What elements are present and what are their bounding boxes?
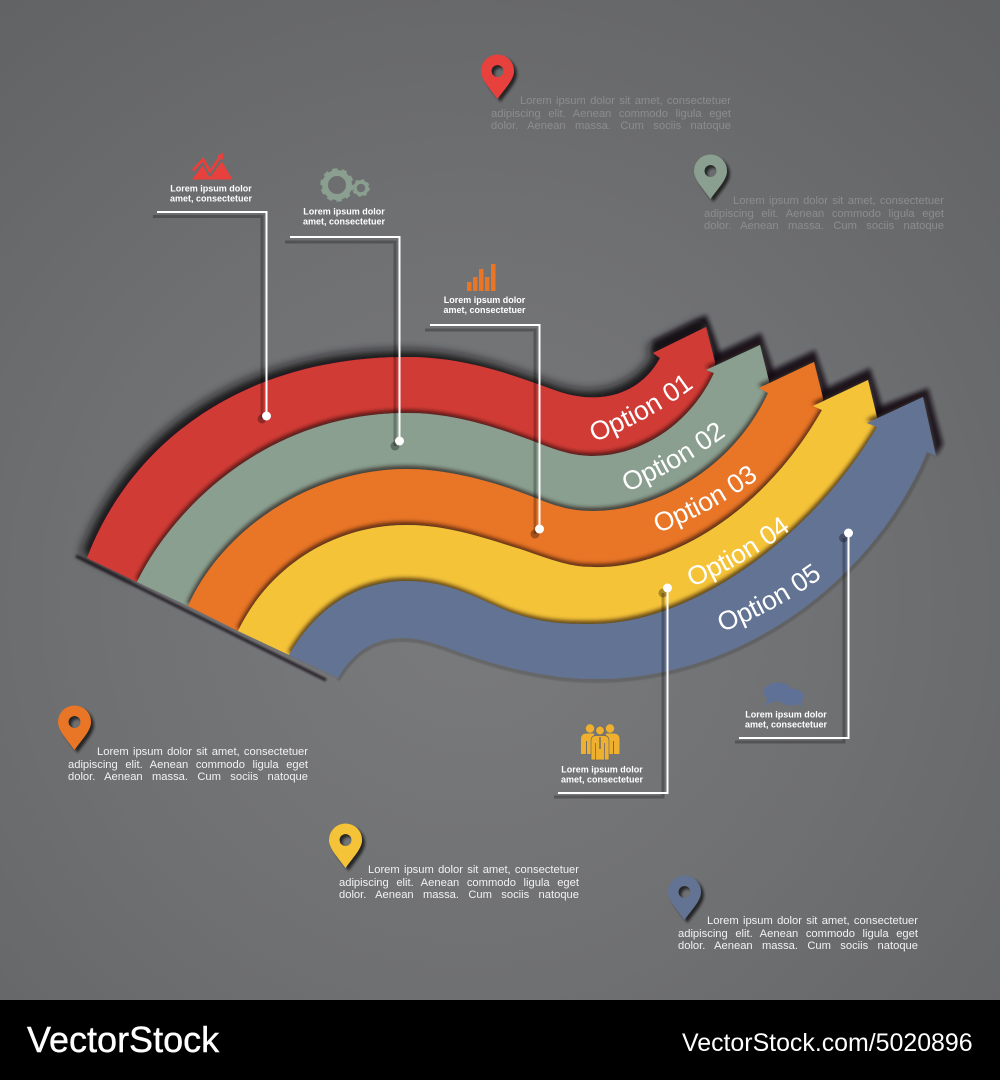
- label: option 01: Option 01: [590, 375, 694, 440]
- text block: blue pin: adipiscing elit. Aenean commodo ligula eget: [678, 928, 918, 940]
- pin: red: [481, 54, 514, 99]
- text block: red pin: Lorem ipsum dolor sit amet, consectetuer: [520, 95, 731, 107]
- text block: orange pin: adipiscing elit. Aenean commodo ligula eget: [68, 758, 308, 770]
- text block: yellow pin: adipiscing elit. Aenean commodo ligula eget: [339, 876, 579, 888]
- icon: gears: [322, 170, 369, 200]
- pin: blue: [668, 876, 701, 920]
- band: option 04: [238, 380, 877, 655]
- leader line 4: [554, 584, 672, 797]
- band: option 03: [188, 362, 823, 631]
- icon: people: [581, 724, 620, 760]
- caption 4: Lorem ipsum dolor: [561, 764, 643, 774]
- caption 5: Lorem ipsum dolor: [745, 710, 827, 720]
- text block: green pin: adipiscing elit. Aenean commodo ligula eget: [704, 208, 944, 220]
- band: option 02: [137, 345, 769, 606]
- icon: bar chart: [467, 264, 496, 291]
- leader line 2: [285, 237, 404, 450]
- text block: yellow pin: Lorem ipsum dolor sit amet, consectetuer: [368, 864, 579, 876]
- icon: mountain chart: [192, 153, 232, 180]
- caption 3: Lorem ipsum dolor: [444, 295, 526, 305]
- wave chart: five option bands: [76, 316, 936, 683]
- arrow head shadows: [653, 315, 943, 456]
- leader line 5: [735, 528, 853, 742]
- text block: green pin: [704, 195, 944, 232]
- blue band edge shadow: [338, 454, 929, 681]
- footer brand: VectorStock: [27, 1019, 220, 1060]
- leader line 1: [153, 212, 271, 424]
- pin: green: [694, 154, 727, 199]
- caption 1: amet, consectetuer: [170, 194, 253, 204]
- footer bar: [0, 1000, 1000, 1080]
- text block: red pin: dolor. Aenean massa. Cum sociis natoque: [491, 120, 731, 132]
- caption 1: Lorem ipsum dolor: [170, 184, 252, 194]
- text block: blue pin: [678, 915, 918, 952]
- icon: speech bubbles: [764, 682, 804, 708]
- text block: green pin: dolor. Aenean massa. Cum sociis natoque: [704, 220, 944, 232]
- band: option 05: [289, 397, 936, 679]
- text block: yellow pin: [339, 864, 579, 901]
- pin: orange: [58, 706, 91, 750]
- text block: orange pin: [68, 746, 308, 783]
- label: option 02: Option 02: [623, 422, 726, 490]
- caption 5: amet, consectetuer: [745, 720, 828, 730]
- text block: red pin: [491, 95, 731, 132]
- label: option 03: Option 03: [654, 466, 756, 530]
- text block: yellow pin: dolor. Aenean massa. Cum sociis natoque: [339, 889, 579, 901]
- baseline shadow: [76, 556, 326, 680]
- caption 2: amet, consectetuer: [303, 216, 386, 226]
- footer url: VectorStock.com/5020896: [682, 1029, 973, 1057]
- band: option 01: [87, 327, 715, 582]
- pin: yellow: [329, 824, 362, 868]
- caption 3: amet, consectetuer: [443, 305, 526, 315]
- text block: blue pin: Lorem ipsum dolor sit amet, consectetuer: [707, 915, 918, 927]
- text block: red pin: adipiscing elit. Aenean commodo ligula eget: [491, 108, 731, 120]
- text block: blue pin: dolor. Aenean massa. Cum sociis natoque: [678, 940, 918, 952]
- text block: orange pin: Lorem ipsum dolor sit amet, consectetuer: [97, 746, 308, 758]
- label: option 05: Option 05: [718, 564, 820, 630]
- leader line 3: [425, 325, 544, 538]
- text block: orange pin: dolor. Aenean massa. Cum sociis natoque: [68, 771, 308, 783]
- label: option 04: Option 04: [688, 516, 788, 584]
- caption 2: Lorem ipsum dolor: [303, 206, 385, 216]
- text block: green pin: Lorem ipsum dolor sit amet, consectetuer: [733, 195, 944, 207]
- caption 4: amet, consectetuer: [561, 774, 644, 784]
